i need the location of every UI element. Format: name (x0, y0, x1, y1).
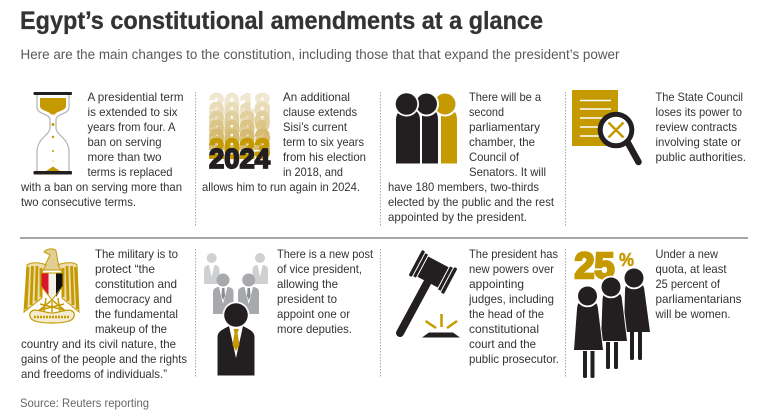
text: judges: judges, including (468, 292, 554, 306)
text: women quota (655, 247, 742, 321)
text: military: constitution and (95, 277, 177, 291)
text: second chamber: appointed by the president. (388, 210, 527, 224)
panel: second chamber (388, 90, 555, 224)
text: additional clause: clause extends (283, 105, 357, 119)
text: presidential term (20, 90, 183, 209)
text: second chamber: There will be a (469, 90, 541, 104)
text: state council: involving state or (656, 135, 741, 149)
text: second chamber (388, 90, 555, 224)
text: judges (468, 247, 559, 366)
text: second chamber: chamber, the (469, 135, 535, 149)
icon: stacked years: 2018 (209, 88, 270, 119)
icon: eagle of Saladin (24, 249, 79, 323)
icon: stacked years (209, 88, 270, 174)
text: military: country and its civil nature, the (21, 337, 176, 351)
text: additional clause: term to six years (283, 135, 364, 149)
text: military: and freedoms of individuals.” (21, 367, 167, 381)
text: presidential term: years from four. A (88, 120, 176, 134)
text: second chamber: Senators. It will (469, 165, 546, 179)
text: judges: court and the (469, 337, 536, 351)
text: second chamber: second (469, 105, 504, 119)
text: presidential term: is extended to six (88, 105, 178, 119)
text: state council: loses its power to (656, 105, 742, 119)
text: presidential term: more than two (88, 150, 162, 164)
text: state council: review contracts (656, 120, 737, 134)
text: presidential term: terms is replaced (88, 165, 172, 179)
text: presidential term: A presidential term (88, 90, 184, 104)
icon: document and magnifier (572, 90, 638, 162)
text: state council: The State Council (656, 90, 743, 104)
text: military (21, 247, 187, 381)
text: judges: new powers over (469, 262, 554, 276)
text: vice president: allowing the (277, 277, 338, 291)
text: judges: The president has (469, 247, 558, 261)
icon: stacked years: 2022 (209, 124, 270, 155)
text: judges: constitutional (469, 322, 539, 336)
text: additional clause: allows him to run again in 2024. (202, 180, 360, 194)
text: women quota: will be women. (655, 307, 730, 321)
text: judges: public prosecutor. (469, 352, 559, 366)
text: presidential term: ban on serving (88, 135, 162, 149)
text: second chamber: Council of (469, 150, 520, 164)
text: additional clause: An additional (283, 90, 350, 104)
text: second chamber: have 180 members, two-thirds (388, 180, 539, 194)
subtitle: Here are the main changes to the constitution, including those that that expand the president’s power (20, 47, 620, 62)
text: second chamber: parliamentary (469, 120, 540, 134)
text: women quota: 25 percent of (656, 277, 721, 291)
text: additional clause: from his election (283, 150, 366, 164)
text: additional clause: Sisi’s current (283, 120, 348, 134)
panel: military (21, 247, 187, 381)
icon: stacked years: 2019 (209, 97, 270, 128)
icon: 25 percent and women: % (619, 250, 634, 270)
text: vice president: president to (277, 292, 337, 306)
text: state council: public authorities. (656, 150, 746, 164)
text: vice president: of vice president, (277, 262, 362, 276)
text: women quota: Under a new (656, 247, 718, 261)
text: vice president: more deputies. (277, 322, 352, 336)
icon: gavel (400, 250, 460, 338)
text: presidential term: two consecutive terms. (21, 195, 136, 209)
text: additional clause (202, 90, 366, 194)
icon: hourglass (34, 92, 72, 174)
text: women quota: quota, at least (656, 262, 727, 276)
panel: additional clause (202, 88, 366, 194)
panel: vice president (204, 247, 374, 376)
icon: president and deputies (204, 253, 268, 376)
text: military: gains of the people and the rights (21, 352, 187, 366)
text: additional clause: in 2018, and (283, 165, 343, 179)
panel: presidential term (20, 90, 183, 209)
text: military: protect “the (95, 262, 155, 276)
icon: 25 percent and women (574, 245, 650, 378)
icon: stacked years: 2021 (209, 115, 270, 146)
text: military: makeup of the (95, 322, 167, 336)
panel: women quota (574, 245, 742, 378)
panel: judges (400, 247, 559, 366)
icon: stacked years: 2023 (209, 133, 270, 164)
icon: 25 percent and women: 25 (574, 245, 614, 286)
text: judges: the head of the (469, 307, 544, 321)
text: women quota: parliamentarians (656, 292, 742, 306)
text: vice president (277, 247, 374, 336)
text: military: The military is to (95, 247, 178, 261)
source note: Source: Reuters reporting (20, 396, 149, 410)
text: military: democracy and (95, 292, 172, 306)
text: second chamber: elected by the public and the rest (388, 195, 555, 209)
text: judges: appointing (469, 277, 524, 291)
icon: stacked years: 2020 (209, 106, 270, 137)
text: presidential term: with a ban on serving more than (20, 180, 182, 194)
text: vice president: appoint one or (277, 307, 350, 321)
panel: state council (572, 90, 746, 164)
icon: three senators (394, 92, 458, 164)
icon: stacked years: 2024 (209, 143, 270, 174)
text: vice president: There is a new post (277, 247, 374, 261)
title: Egypt’s constitutional amendments at a glance (20, 7, 543, 35)
text: military: the fundamental (95, 307, 178, 321)
text: state council (656, 90, 746, 164)
